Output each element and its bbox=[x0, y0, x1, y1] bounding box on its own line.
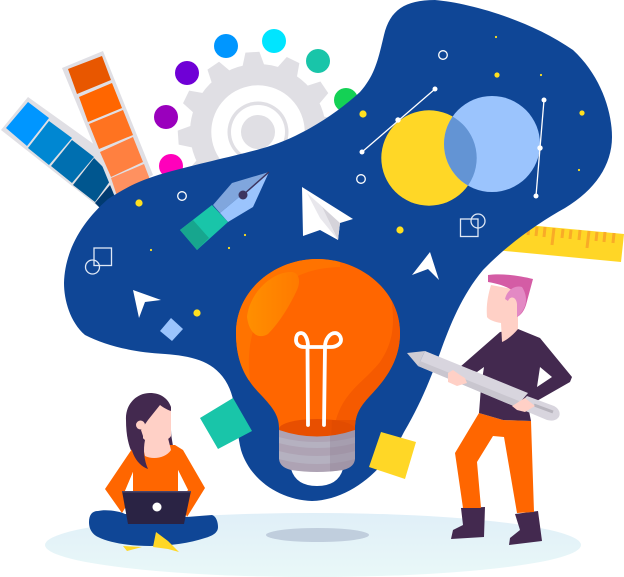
gap between arm and body bbox=[537, 367, 552, 387]
woman ear bbox=[136, 420, 145, 430]
woman hair bbox=[126, 393, 173, 469]
man sweater bbox=[460, 329, 572, 421]
bulb shading bbox=[236, 259, 400, 436]
yellow star dots bbox=[135, 36, 585, 317]
bulb floor shadow bbox=[266, 528, 369, 542]
ruler bbox=[495, 222, 624, 262]
woman neck bbox=[143, 436, 171, 458]
bulb screw base bbox=[279, 430, 355, 472]
cursor arrow right bbox=[412, 252, 439, 280]
square and circle icon right bbox=[460, 214, 485, 236]
small outlined circles bbox=[178, 51, 447, 200]
woman hair side lock bbox=[128, 425, 148, 469]
woman sweater bbox=[105, 445, 205, 517]
laptop bbox=[122, 491, 191, 524]
paper plane bbox=[302, 187, 353, 240]
woman white gaps bbox=[125, 470, 188, 491]
man left boot bbox=[451, 507, 485, 539]
blue blob background bbox=[64, 0, 612, 501]
colour dots around gear bbox=[154, 29, 358, 178]
man left hand bbox=[448, 370, 467, 386]
woman yellow shoes bbox=[123, 532, 179, 552]
orange colour swatch bbox=[62, 51, 154, 205]
woman face bbox=[141, 405, 171, 441]
square and circle icon left bbox=[86, 248, 112, 274]
man right boot bbox=[509, 511, 542, 545]
man with pencil bbox=[407, 274, 572, 545]
man right hand bbox=[512, 398, 535, 412]
pen nib tool bbox=[180, 172, 269, 250]
woman legs bbox=[89, 510, 218, 546]
venn circles bbox=[381, 96, 540, 206]
bezier handle left bbox=[360, 86, 438, 154]
man hair bbox=[488, 274, 533, 317]
blue colour swatch bbox=[1, 97, 130, 208]
cursor arrow left bbox=[133, 290, 161, 318]
filament bbox=[296, 333, 341, 425]
woman with laptop bbox=[89, 393, 218, 552]
light blue diamond bbox=[160, 318, 183, 341]
ground ellipse bbox=[45, 513, 581, 577]
bulb glass bbox=[236, 259, 400, 440]
bulb dome tip bbox=[291, 469, 343, 486]
teal square bbox=[200, 398, 252, 449]
yellow square bbox=[369, 432, 416, 479]
bezier handle right bbox=[534, 98, 546, 198]
pencil bbox=[407, 351, 560, 421]
gear icon bbox=[177, 51, 339, 213]
man hair highlight and ear bbox=[505, 287, 526, 317]
light bulb bbox=[236, 259, 400, 486]
man trousers bbox=[455, 413, 534, 513]
man head and neck bbox=[487, 285, 518, 342]
